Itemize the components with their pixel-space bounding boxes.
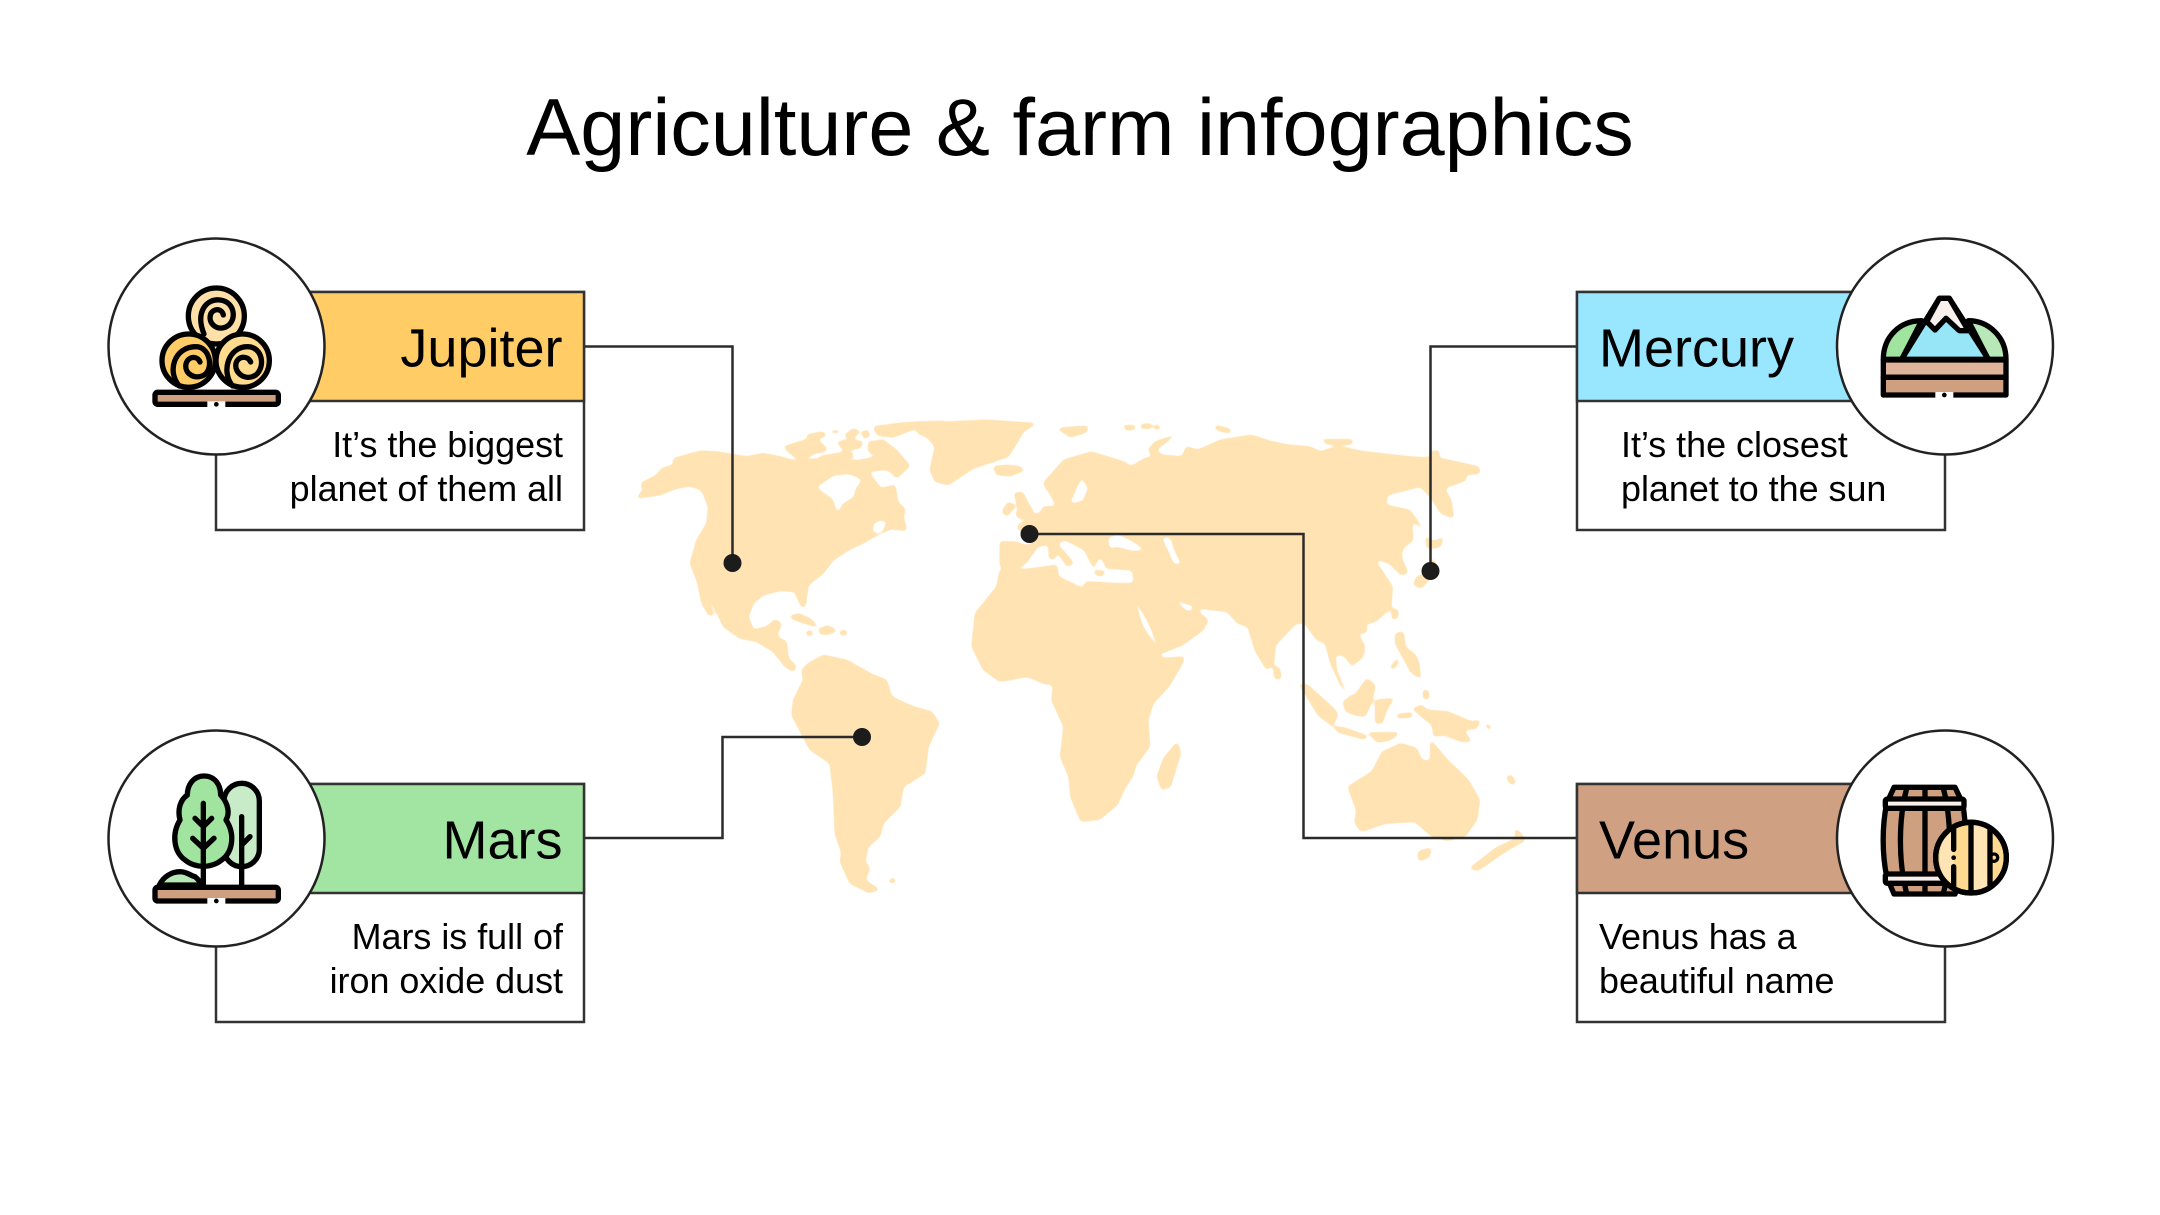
panel: Venus: Venus has a xyxy=(1599,917,1797,957)
panel: Mercury: Mercury xyxy=(1599,318,1794,378)
connector: Venus to Europe xyxy=(1020,525,1577,838)
panel: Mars: iron oxide dust xyxy=(330,961,563,1001)
panel: Mars xyxy=(108,730,584,1022)
connector: Mars to South America xyxy=(584,728,871,838)
icon: trees xyxy=(155,776,278,903)
panel: Mercury: planet to the sun xyxy=(1621,469,1886,509)
panel: Venus: beautiful name xyxy=(1599,961,1834,1001)
panel: Venus: Venus xyxy=(1599,810,1749,870)
panel: Venus xyxy=(1577,730,2053,1022)
connector: Mercury to Japan xyxy=(1422,346,1577,580)
panel: Jupiter: Jupiter xyxy=(400,318,563,378)
panel: Mercury: It’s the closest xyxy=(1621,425,1848,465)
panel: Jupiter: planet of them all xyxy=(290,469,563,509)
connector: Jupiter to North America xyxy=(584,346,742,572)
panel: Jupiter xyxy=(108,238,584,530)
panel: Mars: Mars xyxy=(442,810,562,870)
panel: Mars: Mars is full of xyxy=(352,917,564,957)
title: Agriculture & farm infographics xyxy=(526,83,1634,173)
icon: hay bales xyxy=(155,288,278,407)
icon: mountain field xyxy=(1883,298,2006,397)
panel: Mercury xyxy=(1577,238,2053,530)
panel: Jupiter: It’s the biggest xyxy=(332,425,563,465)
world map xyxy=(630,412,1530,902)
icon: barrel xyxy=(1883,787,2006,894)
